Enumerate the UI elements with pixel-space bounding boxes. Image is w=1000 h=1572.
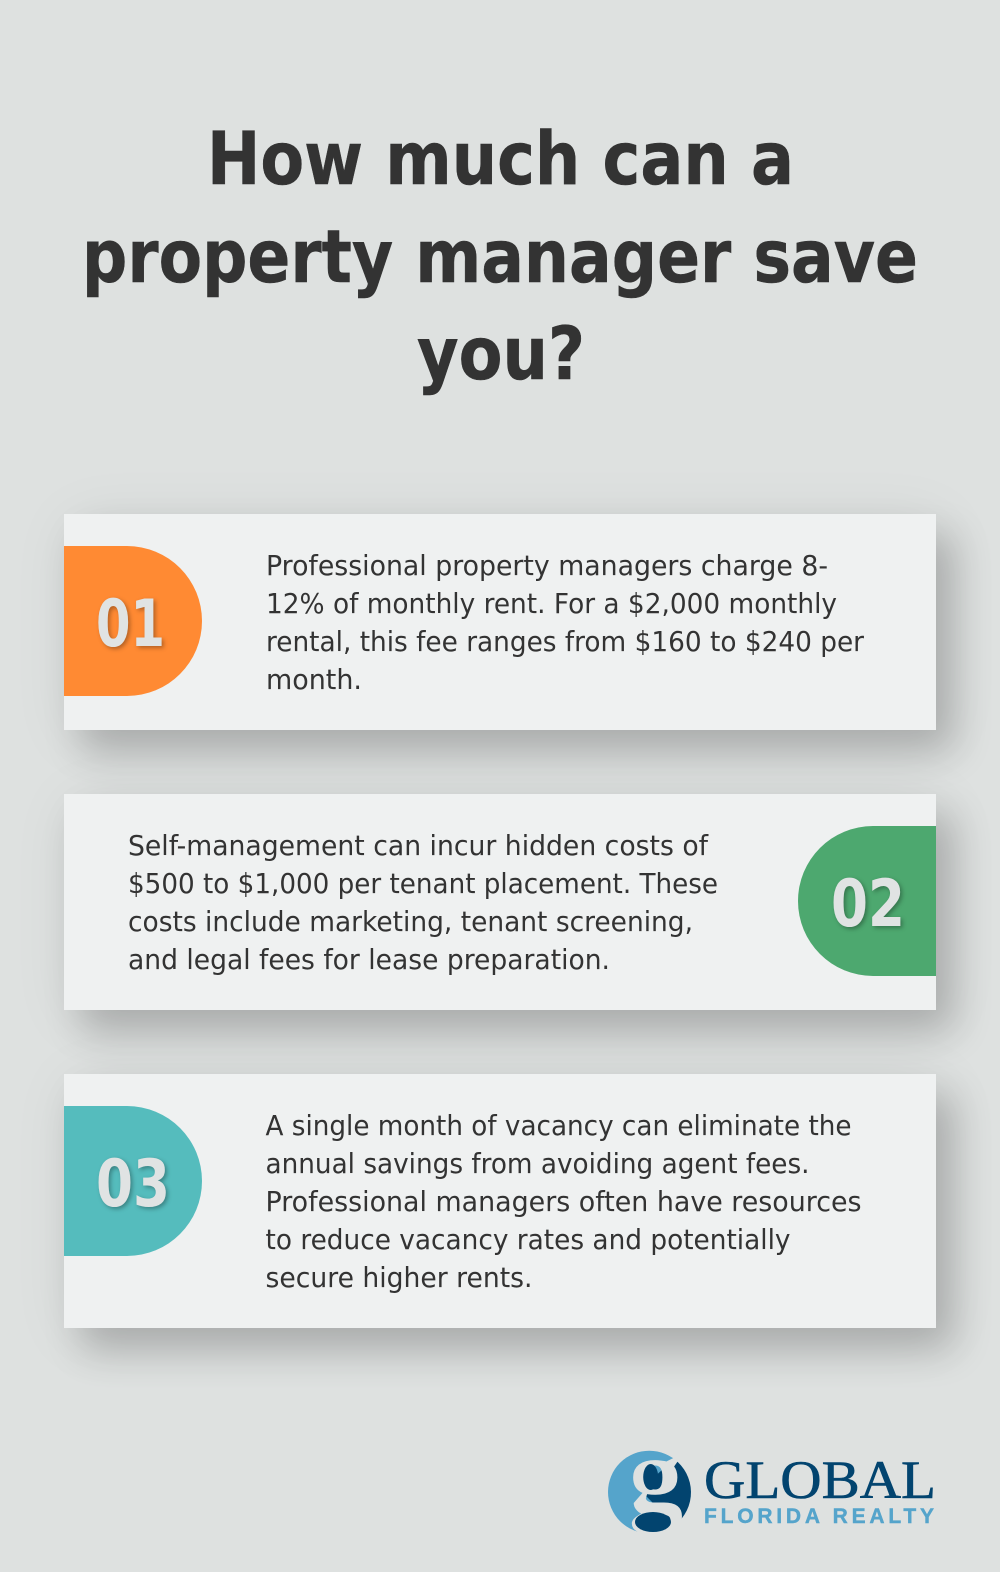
text block: card 1: 12% of monthly rent. For a $2,000 monthly <box>266 589 837 620</box>
text block: card 1: Professional property managers charge 8- <box>266 551 828 582</box>
badge 02 <box>798 826 936 976</box>
title <box>82 117 918 397</box>
text block: card 3: to reduce vacancy rates and potentially <box>266 1225 790 1256</box>
text block: card 2: $500 to $1,000 per tenant placement. These <box>128 869 718 900</box>
badge 01 <box>64 546 202 696</box>
text block: card 2: Self-management can incur hidden costs of <box>128 831 709 862</box>
badge 03: 03 <box>96 1147 170 1222</box>
badge 03 <box>64 1106 202 1256</box>
text block: card 3: A single month of vacancy can eliminate the <box>266 1111 852 1142</box>
panel: card 1 <box>64 514 936 730</box>
logo: Global Florida Realty <box>608 1440 936 1535</box>
text block: card 3: annual savings from avoiding agent fees. <box>266 1149 810 1180</box>
badge 02: 02 <box>831 867 905 942</box>
text block: card 1: month. <box>266 665 362 696</box>
text block: card 2: costs include marketing, tenant screening, <box>128 907 693 938</box>
title: How much can a <box>207 117 794 202</box>
title: you? <box>417 312 585 397</box>
text block: card 3: secure higher rents. <box>266 1263 532 1294</box>
icon: logo circle with g <box>608 1450 691 1532</box>
text block: card 1: rental, this fee ranges from $160 to $240 per <box>266 627 865 658</box>
panel: card 3 <box>64 1074 936 1328</box>
text block: card 3: Professional managers often have resources <box>266 1187 862 1218</box>
text block: card 2 <box>128 831 718 976</box>
badge 01: 01 <box>96 587 165 662</box>
panel: card 2 <box>64 794 936 1010</box>
text block: card 1 <box>266 551 865 696</box>
wordmark: FLORIDA REALTY: FLORIDA REALTY <box>704 1505 934 1528</box>
text block: card 3 <box>266 1111 862 1294</box>
text block: card 2: and legal fees for lease preparation. <box>128 945 610 976</box>
wordmark: GLOBAL: GLOBAL <box>704 1450 936 1510</box>
